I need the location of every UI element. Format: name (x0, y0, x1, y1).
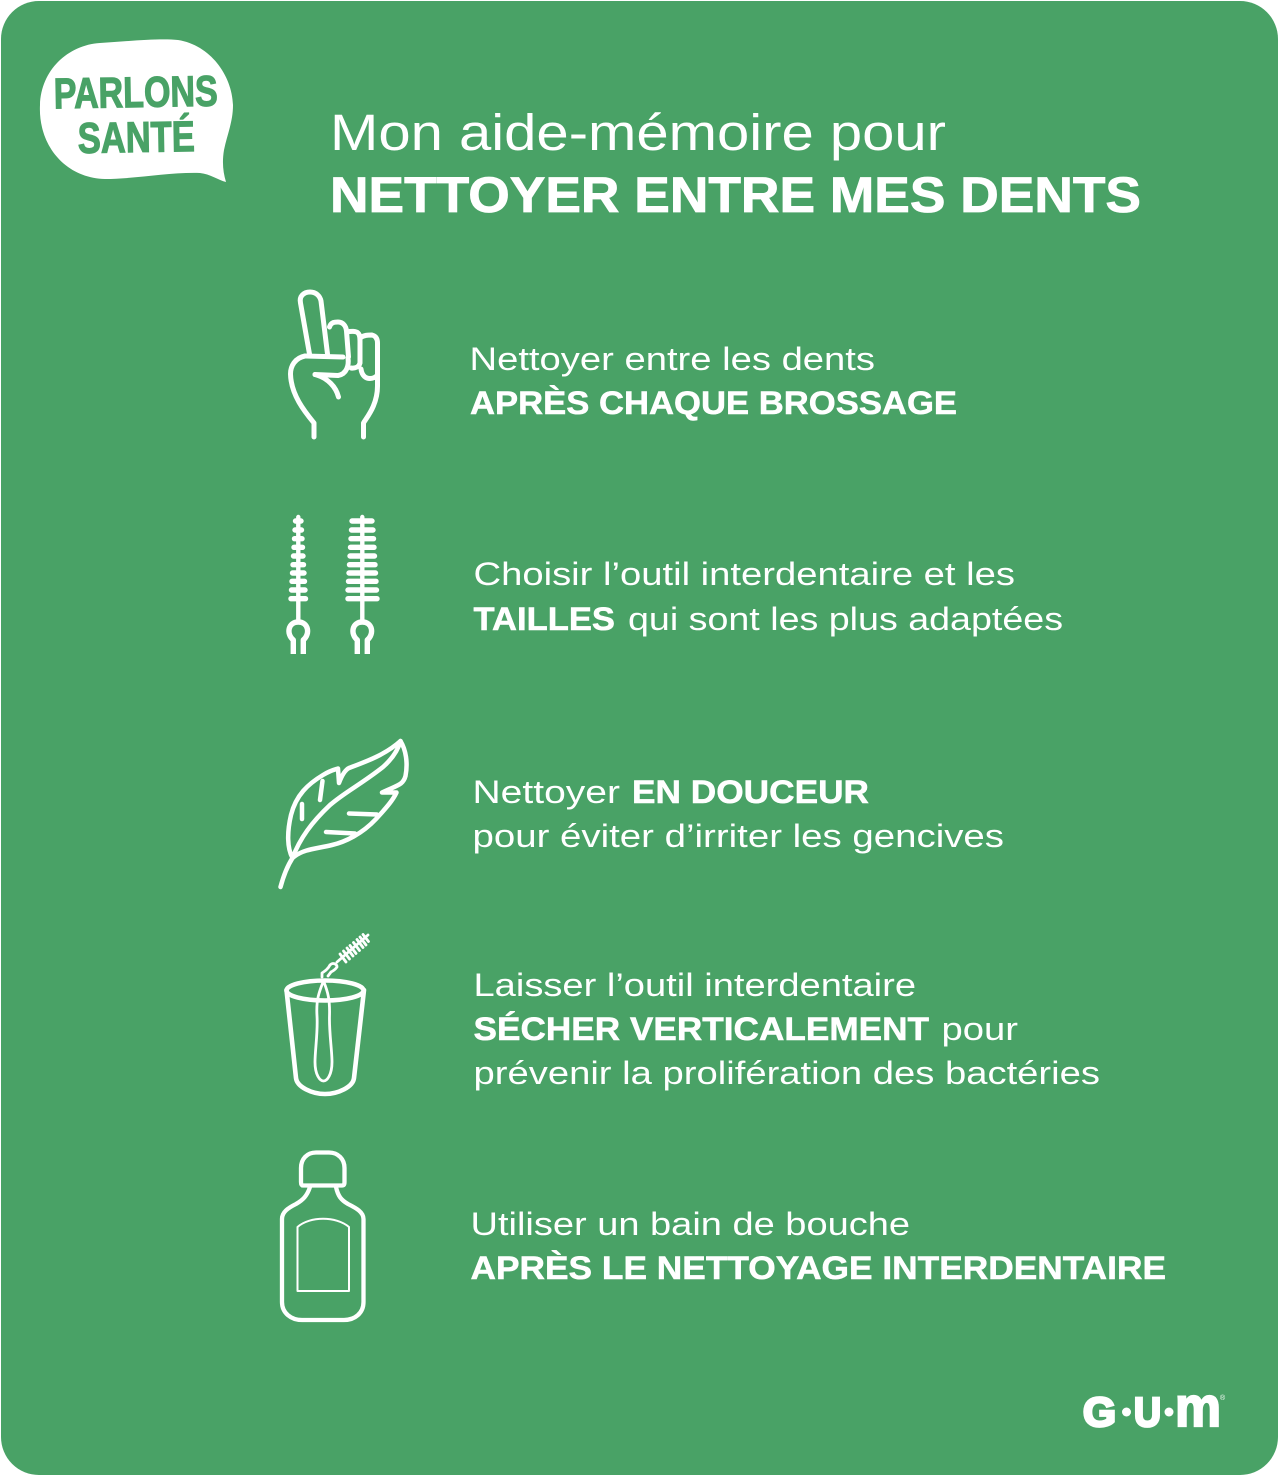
step 4 text: Laisser l’outil interdentaire (474, 967, 916, 1003)
icon: interdental brushes (289, 517, 377, 654)
step 2 text (474, 556, 1063, 637)
step 2 text: qui sont les plus adaptées (628, 601, 1063, 637)
icon: brush drying in a cup (286, 934, 368, 1094)
step 4 text (474, 967, 1100, 1091)
icon: mouthwash bottle (282, 1152, 364, 1320)
step 1 text: APRÈS CHAQUE BROSSAGE (470, 385, 957, 421)
left brush (289, 517, 308, 654)
logo: GUM: G (1083, 1389, 1116, 1435)
step 4 text: SÉCHER VERTICALEMENT (474, 1011, 929, 1047)
bottle body (282, 1187, 364, 1320)
title: NETTOYER ENTRE MES DENTS (330, 167, 1141, 223)
step 2 text: TAILLES (474, 601, 615, 637)
step 5 text (470, 1206, 1166, 1286)
step 5 text: Utiliser un bain de bouche (470, 1206, 910, 1242)
logo: GUM: ® (1220, 1394, 1226, 1402)
step 3 text (472, 774, 1004, 854)
step 4 text: pour (942, 1011, 1018, 1047)
icon: feather leaf (280, 741, 407, 887)
step 3 text: pour éviter d’irriter les gencives (472, 818, 1004, 854)
icon: raised index finger hand (290, 292, 378, 437)
step 5 text: APRÈS LE NETTOYAGE INTERDENTAIRE (470, 1250, 1166, 1286)
logo: GUM (1083, 1375, 1226, 1438)
step 1 text (470, 341, 957, 421)
title (330, 104, 1141, 223)
title: Mon aide-mémoire pour (330, 104, 946, 161)
step 1 text: Nettoyer entre les dents (470, 341, 875, 377)
step 4 text: prévenir la prolifération des bactéries (474, 1055, 1100, 1091)
step 3 text: Nettoyer (472, 774, 620, 810)
bottle cap (301, 1152, 344, 1186)
bottle label (298, 1219, 349, 1291)
brush in cup (315, 934, 368, 1081)
cup (286, 980, 364, 1094)
step 3 text: EN DOUCEUR (632, 774, 869, 810)
logo: GUM: U (1134, 1389, 1161, 1435)
badge: Parlons santé speech bubble: PARLONS (53, 68, 218, 118)
badge: Parlons santé speech bubble: SANTÉ (77, 113, 195, 163)
badge: Parlons santé speech bubble (40, 39, 233, 182)
right brush (348, 517, 377, 654)
logo: GUM: m (1175, 1375, 1221, 1438)
step 2 text: Choisir l’outil interdentaire et les (474, 556, 1015, 592)
